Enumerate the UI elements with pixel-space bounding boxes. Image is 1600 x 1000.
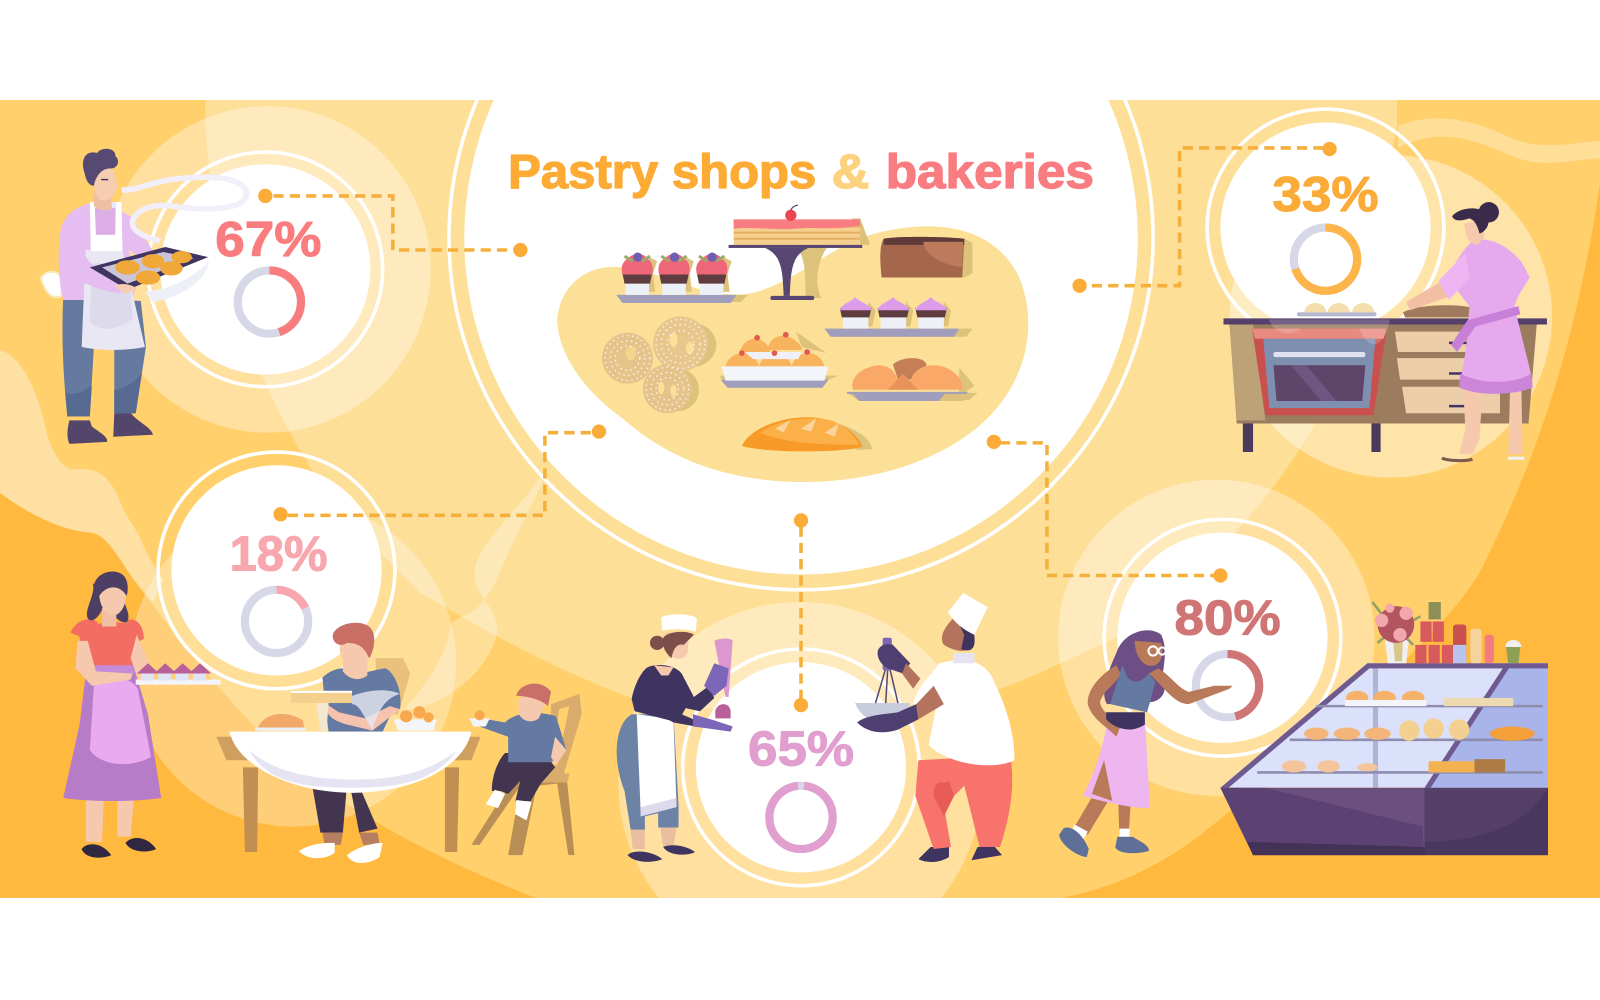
person: baker with tray — [41, 149, 246, 444]
stat 67%: 67% — [215, 213, 321, 267]
title: & — [832, 146, 869, 199]
food: cake on stand — [729, 205, 869, 300]
food: muffins — [720, 332, 839, 388]
person: pastry chef with piping bag — [617, 614, 733, 862]
stat 80%: 80% — [1174, 592, 1281, 646]
translucent disc edge over oven — [1268, 319, 1390, 344]
food: loaf — [880, 237, 972, 278]
center circle — [447, 100, 1155, 592]
person: chef with whisk — [855, 593, 1014, 862]
table with man and child — [216, 623, 582, 863]
food: croissants — [847, 358, 978, 401]
title — [508, 146, 1094, 199]
display case — [1220, 602, 1548, 855]
stat 65%: 65% — [748, 722, 854, 776]
person: woman rolling dough — [1223, 202, 1547, 461]
stat 18%: 18% — [230, 527, 328, 581]
food: lilac cupcakes — [824, 297, 972, 337]
stat 18% — [158, 452, 395, 689]
stat 33% — [1207, 109, 1444, 346]
halos — [104, 106, 1552, 965]
stat 33%: 33% — [1272, 168, 1379, 222]
connectors — [258, 142, 1337, 712]
stat 67% — [148, 152, 383, 387]
stat 80% — [1104, 519, 1341, 756]
title: bakeries — [886, 146, 1094, 199]
food: pretzels — [602, 316, 716, 413]
food blob — [557, 226, 1028, 482]
stat 65% — [683, 649, 919, 886]
person: woman with cupcakes — [63, 571, 220, 858]
panel: background — [0, 100, 1600, 898]
food: berry cupcakes — [616, 253, 748, 303]
title: Pastry shops — [508, 146, 816, 199]
person: customer pointing — [1059, 630, 1233, 857]
food: bread — [742, 417, 872, 451]
